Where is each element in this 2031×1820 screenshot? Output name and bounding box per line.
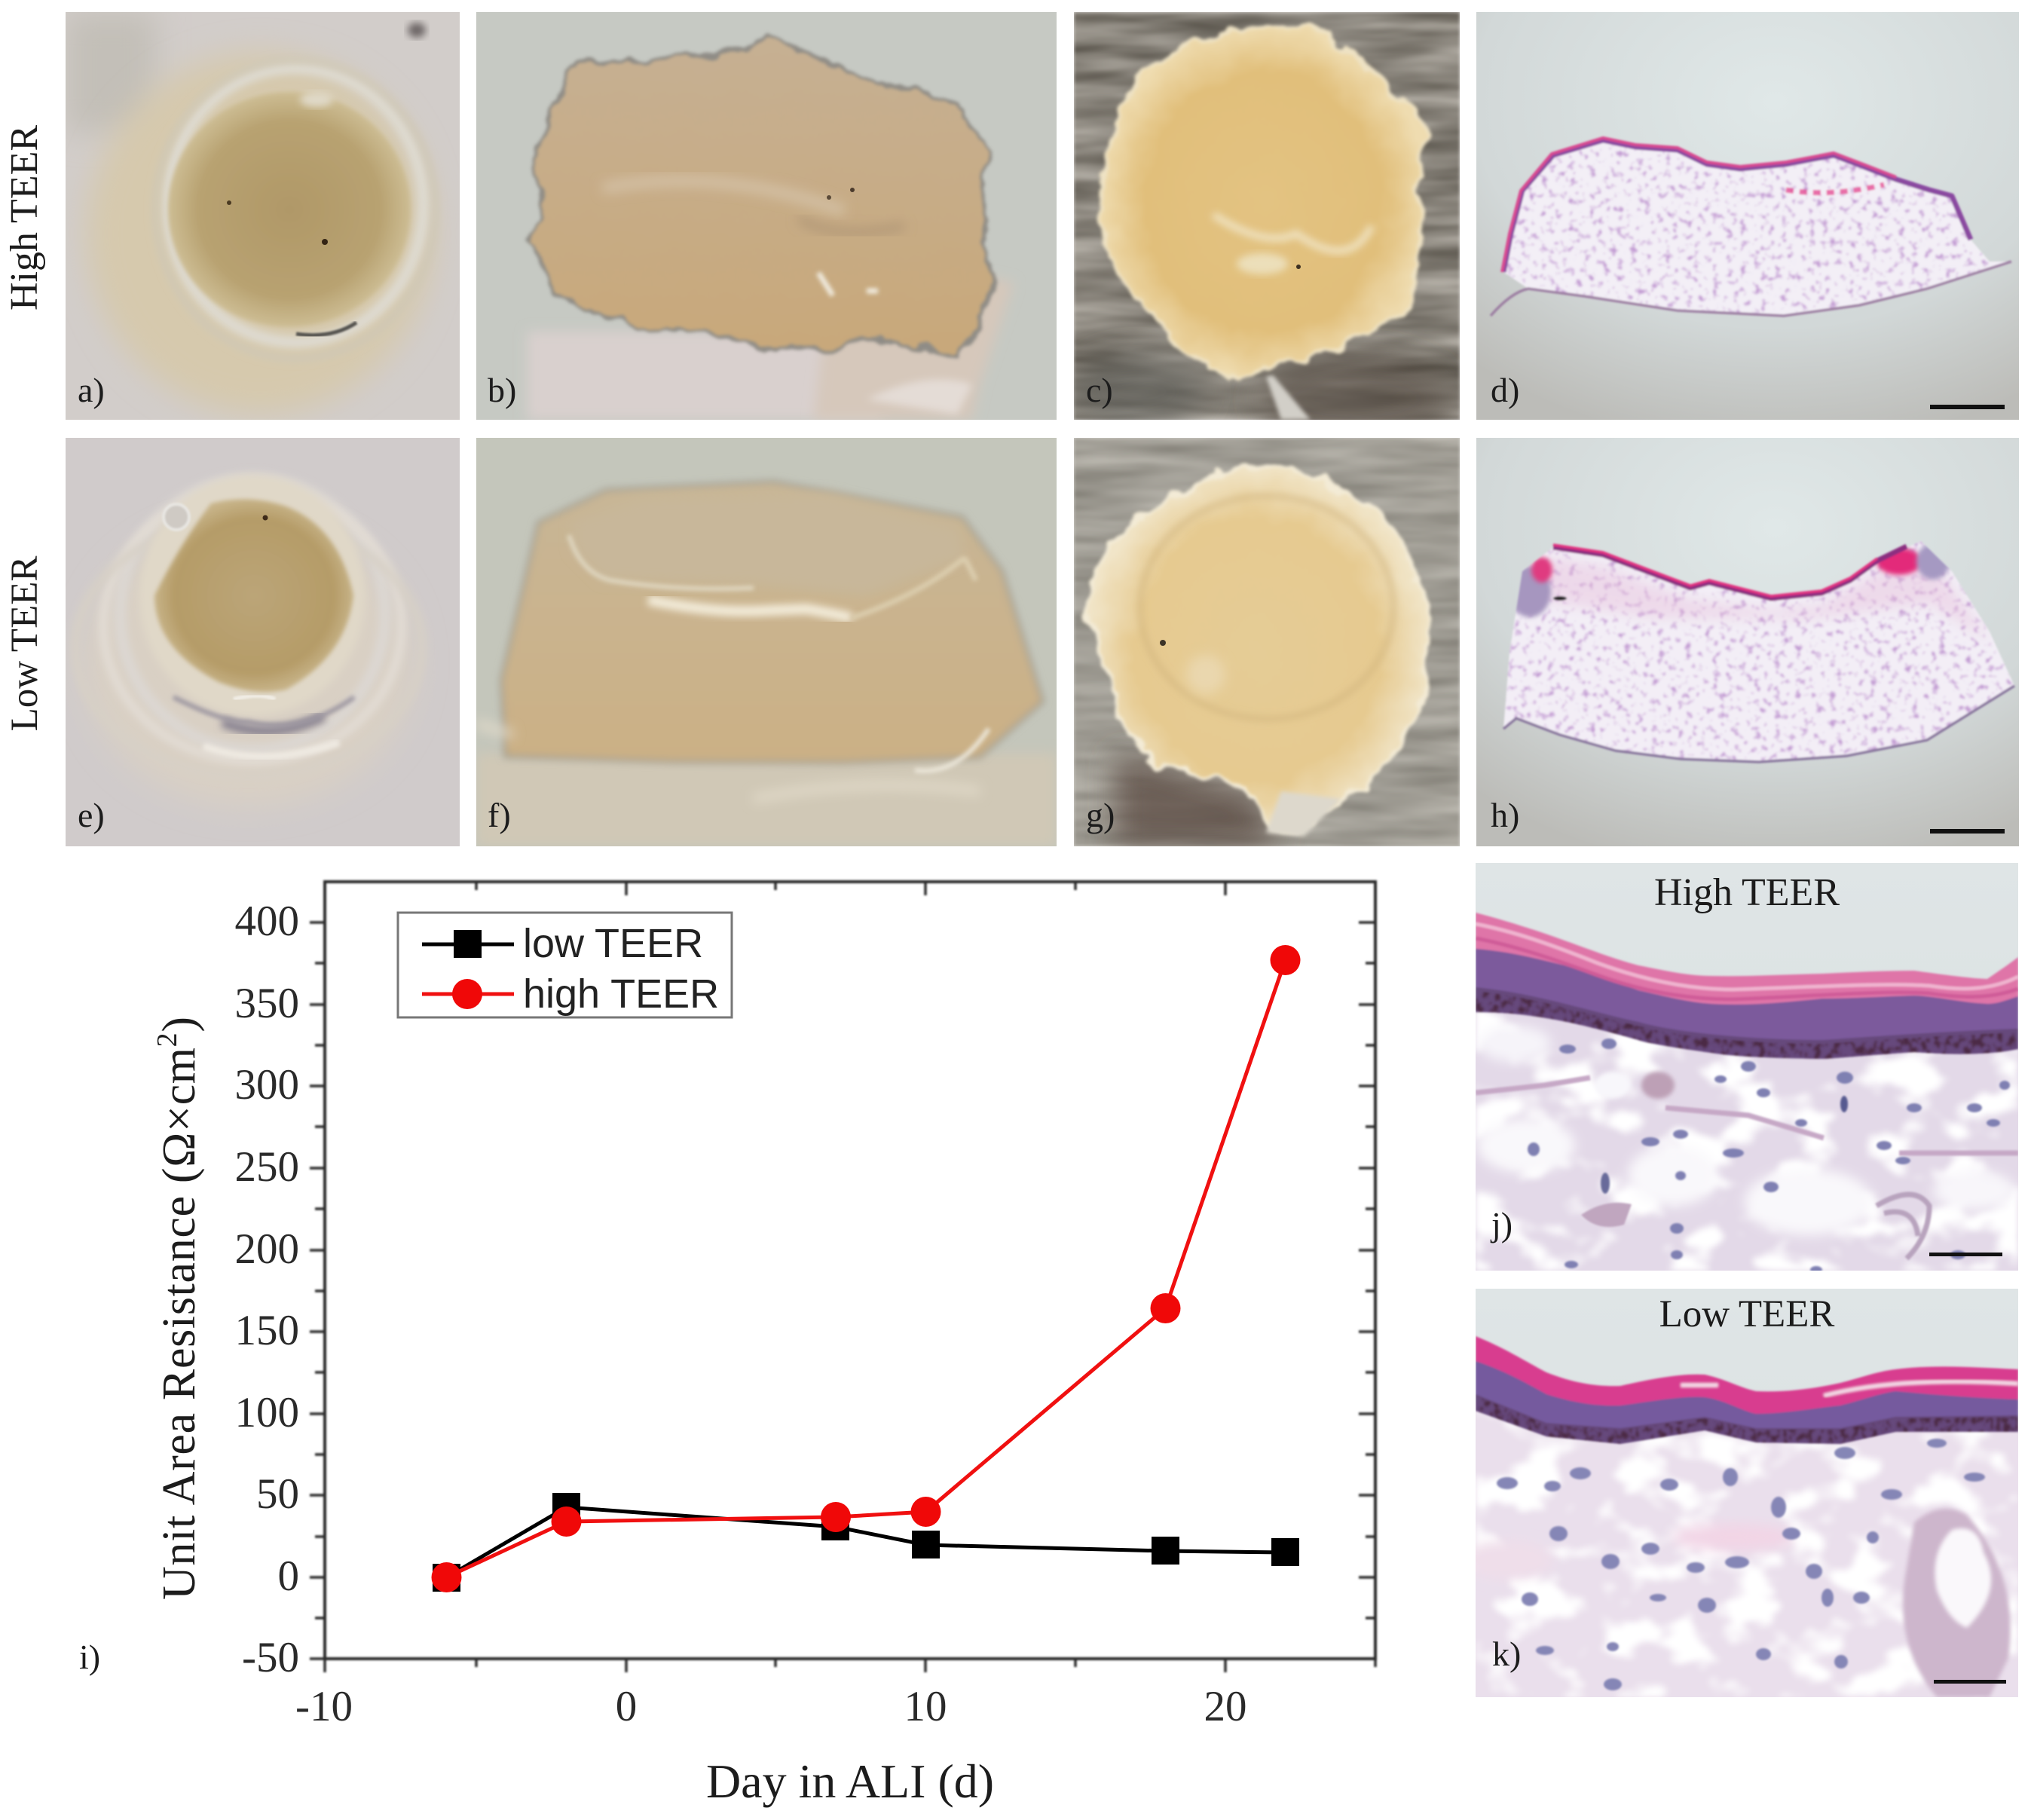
panel c: high TEER tissue on wood: [1074, 12, 1460, 420]
legend: high TEER: [523, 971, 719, 1017]
scale bar d: [1930, 405, 2005, 409]
dermis j: [1476, 1006, 2018, 1274]
y axis tick labels: 250: [235, 1143, 299, 1191]
legend: [398, 913, 732, 1017]
panel label i: i): [79, 1638, 100, 1676]
heading: Low TEER: Low TEER: [1659, 1293, 1834, 1335]
y axis tick labels: 150: [235, 1307, 299, 1354]
tissue section d: [1491, 128, 2020, 324]
y axis tick labels: 400: [235, 898, 299, 945]
scale bar h: [1930, 829, 2005, 834]
panel e: low TEER insert top view: [66, 438, 460, 846]
y axis title: ): [154, 1017, 205, 1032]
dermis k: [1462, 1402, 2018, 1697]
y axis tick labels: 50: [256, 1470, 299, 1518]
series: low TEER: [433, 1493, 1299, 1592]
label k: k): [1492, 1635, 1521, 1673]
label j: j): [1490, 1205, 1513, 1243]
scale bar k: [1934, 1680, 2006, 1684]
series: high TEER: [431, 945, 1301, 1592]
y axis title: Unit Area Resistance (Ω×cm: [154, 1048, 205, 1600]
label e: e): [78, 796, 105, 834]
y axis tick labels: 200: [235, 1225, 299, 1273]
label h: h): [1491, 796, 1519, 834]
legend: low TEER: [523, 921, 703, 966]
x axis tick labels: 10: [904, 1683, 947, 1730]
heading: High TEER: High TEER: [1654, 871, 1840, 914]
y axis tick labels: 350: [235, 980, 299, 1027]
x axis tick labels: [295, 1683, 1246, 1730]
panel k: low TEER histology detail: [1476, 1289, 2018, 1697]
y axis title: 2: [151, 1032, 183, 1047]
panel b: high TEER tissue side view: [476, 12, 1057, 420]
plot frame and ticks: [310, 882, 1375, 1672]
row label: Low TEER: Low TEER: [4, 556, 46, 731]
label b: b): [488, 371, 516, 409]
y axis tick labels: 0: [277, 1552, 299, 1600]
label d: d): [1491, 371, 1519, 409]
panel f: low TEER tissue side view: [476, 438, 1057, 846]
panel i: TEER line chart: [79, 882, 1375, 1808]
label c: c): [1086, 371, 1113, 409]
label f: f): [488, 796, 511, 834]
panel d: high TEER histology overview: [1476, 12, 2019, 420]
x axis tick labels: -10: [295, 1683, 353, 1730]
label g: g): [1086, 796, 1115, 834]
x axis tick labels: 0: [616, 1683, 637, 1730]
y axis tick labels: [235, 898, 299, 1681]
epidermis k: [1476, 1336, 2018, 1444]
label a: a): [78, 371, 105, 409]
panel h: low TEER histology overview: [1476, 438, 2019, 846]
x axis tick labels: 20: [1204, 1683, 1246, 1730]
scale bar j: [1929, 1253, 2002, 1256]
panel a: high TEER insert top view: [66, 12, 460, 420]
y axis tick labels: 100: [235, 1389, 299, 1436]
epidermis j: [1476, 913, 2018, 1059]
panel j: high TEER histology detail: [1476, 863, 2018, 1271]
y axis tick labels: 300: [235, 1061, 299, 1109]
row label: High TEER: High TEER: [3, 125, 46, 310]
tissue section h: [1500, 535, 2020, 769]
panel g: low TEER tissue on wood: [1074, 438, 1460, 846]
x axis title: Day in ALI (d): [706, 1754, 994, 1808]
y axis tick labels: -50: [242, 1634, 299, 1681]
